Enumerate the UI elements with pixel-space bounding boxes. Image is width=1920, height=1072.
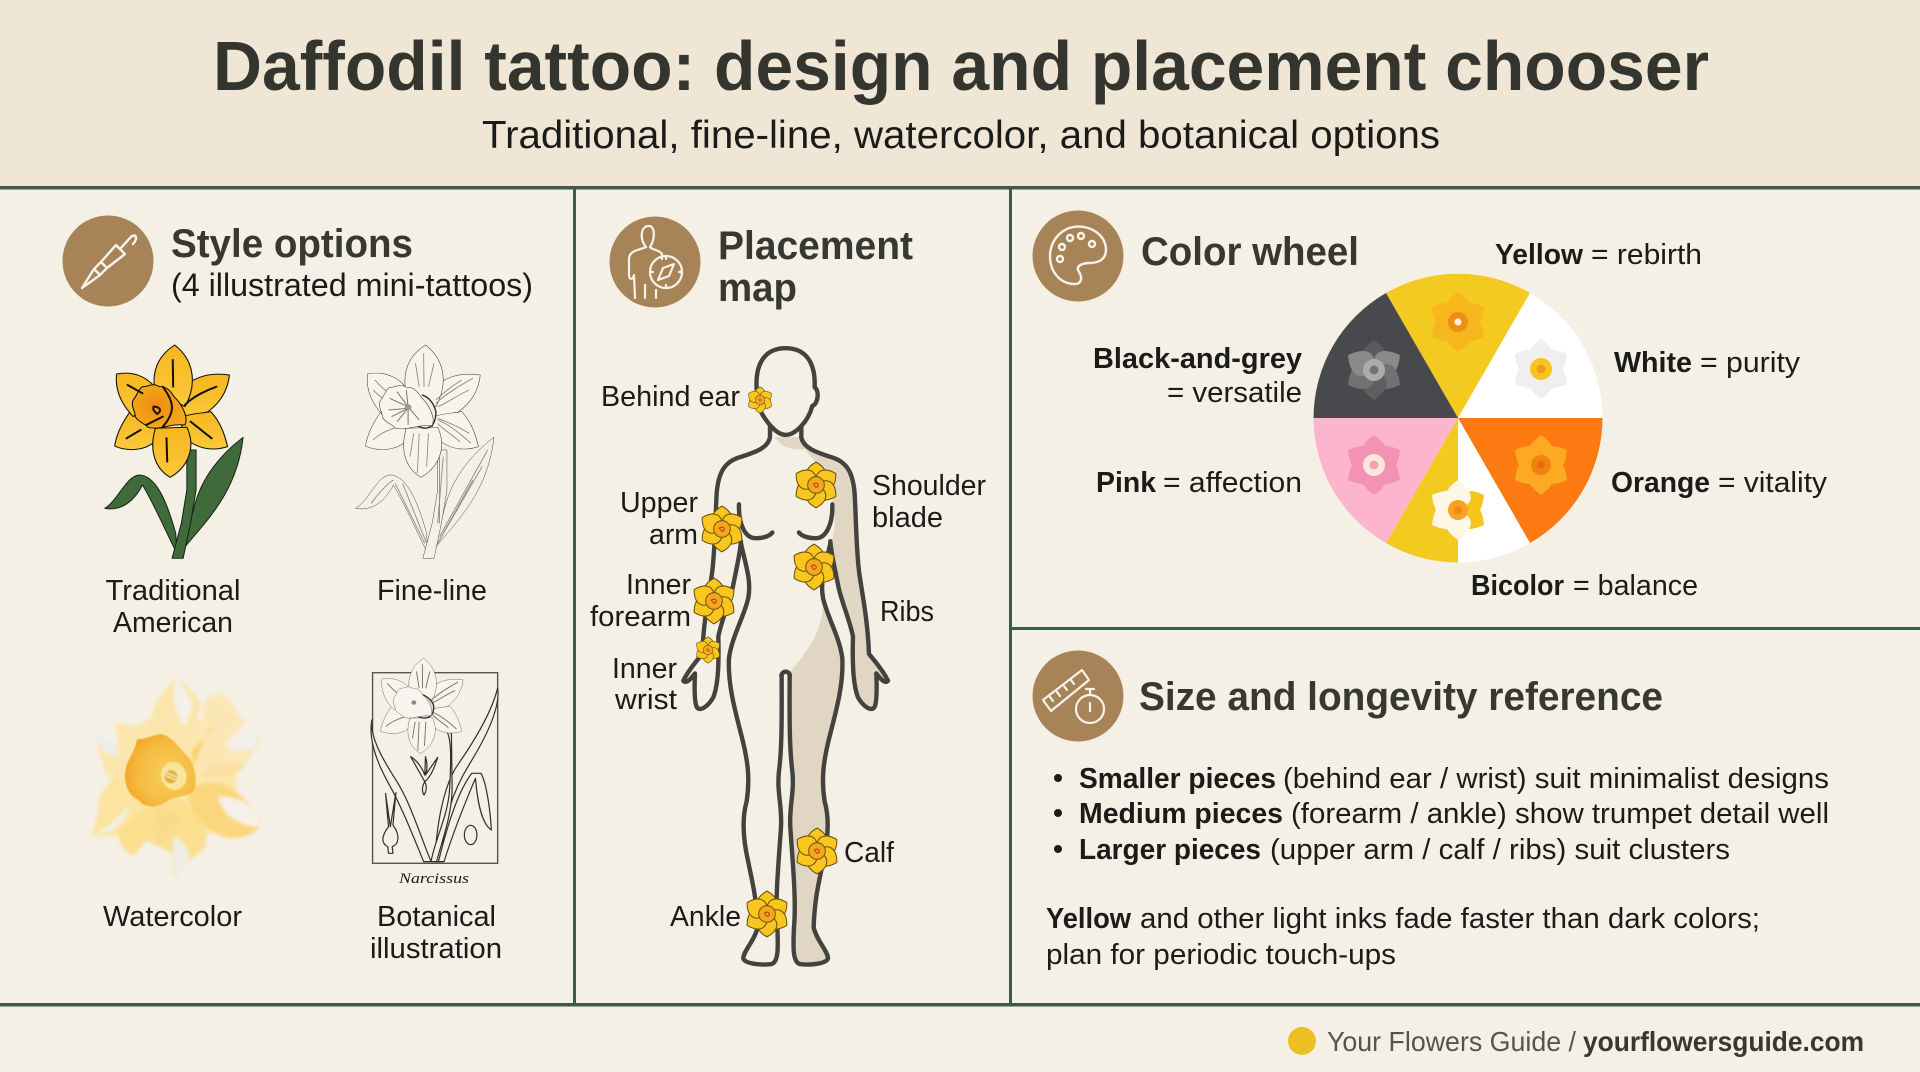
- marker: upper arm: [697, 506, 747, 552]
- panel: size and longevity: [1032, 650, 1829, 971]
- heading: color wheel: Color wheel: [1141, 230, 1359, 274]
- panel: style options: [62, 216, 533, 965]
- marker: calf: [792, 828, 842, 874]
- label: ankle: Ankle: [670, 901, 741, 933]
- label: orange: Orange: [1611, 467, 1710, 499]
- icon: body with compass: [610, 216, 700, 308]
- wedge: yellow: [1386, 274, 1530, 418]
- bullet: medium pieces: Medium pieces: [1079, 798, 1283, 830]
- label: shoulder blade: blade: [872, 502, 943, 534]
- label: inner forearm: forearm: [590, 601, 691, 633]
- wedge: pink: [1314, 418, 1458, 543]
- icon: tattoo machine: [62, 216, 154, 306]
- note: fading inks: plan for periodic touch-ups: [1046, 939, 1396, 971]
- illustration: traditional American daffodil: [105, 345, 243, 558]
- bullet: larger pieces: [1054, 834, 1730, 866]
- icon: ruler and stopwatch: [1032, 650, 1124, 742]
- label: upper arm: Upper: [620, 487, 698, 519]
- bullet list: [1054, 763, 1829, 866]
- label: yellow: = rebirth: [1591, 239, 1702, 271]
- flower: orange: [1509, 435, 1573, 495]
- label: white: White: [1614, 347, 1692, 379]
- wedge: white: [1458, 293, 1602, 418]
- panel: placement map: [590, 216, 986, 965]
- heading: placement map: map: [718, 266, 797, 310]
- label: black-and-grey: = versatile: [1167, 377, 1302, 409]
- title: Daffodil tattoo: design and placement chooser: [213, 27, 1709, 105]
- note: fading inks: and other light inks fade faster than dark colors;: [1140, 903, 1760, 935]
- label: watercolor: Watercolor: [103, 901, 242, 933]
- bullet: larger pieces: Larger pieces: [1079, 834, 1261, 866]
- flower: yellow: [1426, 292, 1490, 352]
- bullet: smaller pieces: (behind ear / wrist) suit minimalist designs: [1283, 763, 1829, 795]
- credit text: yourflowersguide.com: [1583, 1026, 1864, 1057]
- marker: inner wrist: [694, 637, 722, 663]
- body figure: [683, 348, 888, 965]
- label: white: = purity: [1700, 347, 1801, 379]
- icon: yellow dot: [1288, 1027, 1316, 1055]
- wedge: bicolor: [1386, 418, 1530, 562]
- label: bicolor: = balance: [1573, 570, 1698, 602]
- panel: color wheel: [1032, 210, 1828, 602]
- caption: Narcissus: Narcissus: [398, 871, 469, 887]
- label: inner wrist: Inner: [612, 653, 677, 685]
- label: bicolor: Bicolor: [1471, 570, 1564, 602]
- note: fading inks: Yellow: [1046, 903, 1131, 935]
- label: fine-line: Fine-line: [377, 575, 487, 607]
- credit text: Your Flowers Guide /: [1327, 1026, 1576, 1057]
- marker: behind ear: [746, 387, 774, 413]
- subheading: mini-tattoos: (4 illustrated mini-tattoos): [171, 267, 533, 303]
- label: black-and-grey: Black-and-grey: [1093, 343, 1302, 375]
- flower: black-and-grey: [1342, 340, 1406, 400]
- label: botanical illustration: Botanical: [377, 901, 496, 933]
- flower: bicolor: [1426, 480, 1490, 540]
- label: shoulder blade: Shoulder: [872, 470, 986, 502]
- label: traditional american: American: [113, 607, 233, 639]
- heading: size and longevity: Size and longevity reference: [1139, 675, 1663, 719]
- label: orange: = vitality: [1718, 467, 1828, 499]
- footer: [1288, 1026, 1864, 1057]
- marker: ribs: [789, 544, 839, 590]
- illustration: watercolor daffodil: [91, 678, 265, 880]
- heading: placement map: Placement: [718, 224, 913, 268]
- header band: [0, 0, 1920, 186]
- label: inner forearm: Inner: [626, 569, 691, 601]
- subtitle: Traditional, fine-line, watercolor, and botanical options: [482, 114, 1440, 157]
- label: ribs: Ribs: [880, 596, 934, 628]
- label: botanical illustration: illustration: [370, 933, 502, 965]
- wedge: orange: [1458, 418, 1602, 543]
- marker: shoulder blade: [791, 462, 841, 508]
- shaded body zones: [774, 437, 888, 965]
- flower: white: [1509, 339, 1573, 399]
- label: yellow: Yellow: [1495, 239, 1583, 271]
- illustration: botanical plate: [371, 658, 498, 863]
- divider lines: [0, 186, 1920, 1006]
- bullet: larger pieces: (upper arm / calf / ribs) suit clusters: [1270, 834, 1730, 866]
- bullet: smaller pieces: [1054, 763, 1829, 795]
- label: pink: Pink: [1096, 467, 1157, 499]
- chart: color wheel: [1314, 274, 1602, 562]
- label: upper arm: arm: [649, 519, 698, 551]
- illustration: fine-line daffodil: [356, 345, 494, 558]
- label: inner wrist: wrist: [614, 684, 677, 716]
- label: behind ear: Behind ear: [601, 381, 740, 413]
- bullet: smaller pieces: Smaller pieces: [1079, 763, 1276, 795]
- label: calf: Calf: [844, 837, 895, 869]
- icon: palette: [1032, 210, 1124, 302]
- bullet: medium pieces: (forearm / ankle) show trumpet detail well: [1291, 798, 1829, 830]
- wedge: black-and-grey: [1314, 293, 1458, 418]
- marker: ankle: [742, 891, 792, 937]
- flower: pink: [1342, 435, 1406, 495]
- label: pink: = affection: [1163, 467, 1302, 499]
- label: traditional american: Traditional: [106, 575, 240, 607]
- bullet: medium pieces: [1054, 798, 1829, 830]
- marker: inner forearm: [689, 578, 739, 624]
- heading: style options: Style options: [171, 222, 413, 266]
